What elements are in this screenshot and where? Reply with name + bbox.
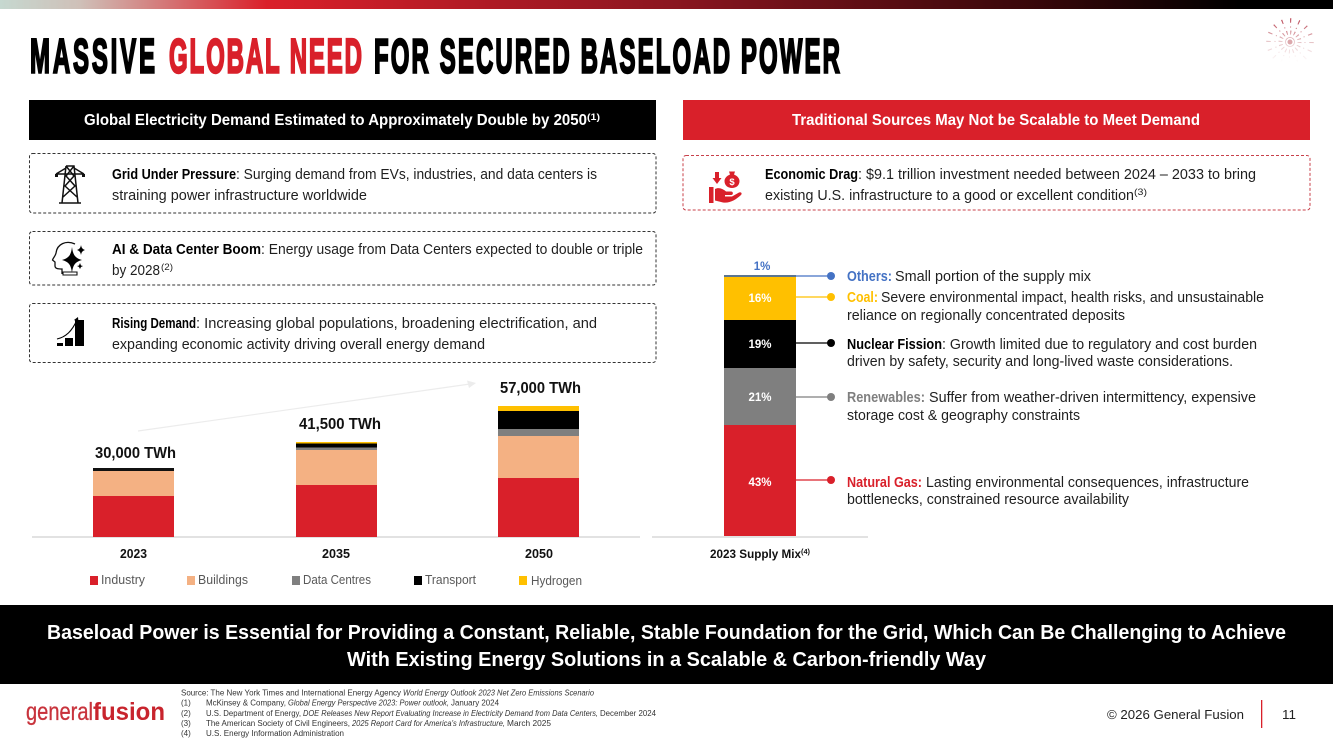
page number [1261,700,1296,728]
callout: AI and data center boom: : Energy usage from Data Centers expected to double or triple [261,242,643,258]
bar: 2050 [498,380,581,561]
text: coal [847,290,1264,324]
text: coal: reliance on regionally concentrated deposits [847,308,1125,324]
connector: nuclear fission [796,339,835,347]
source footnotes: December 2024 [600,709,657,718]
legend: Industry [101,573,146,587]
conclusion banner: Baseload Power is Essential for Providing a Constant, Reliable, Stable Foundation for the Grid, Which Can Be Challenging to Achieve [47,621,1286,644]
source footnotes: (4) [181,729,191,738]
text: natural gas: Natural Gas: [847,475,922,491]
logo: general fusion: general [26,698,93,726]
text: renewables: storage cost & geography constraints [847,408,1080,424]
legend: Transport [425,573,477,587]
legend [90,573,582,588]
source footnotes: U.S. Energy Information Administration [206,729,344,738]
icon: rising bars with arrow [57,317,84,346]
copyright: © 2026 General Fusion [1107,708,1244,722]
panel header: traditional sources: Traditional Sources May Not be Scalable to Meet Demand [792,112,1200,129]
bar: 2023 [93,445,176,561]
callout: AI and data center boom: by 2028 [112,263,160,279]
bar chart: global electricity demand [32,380,640,561]
text: renewables: Renewables: [847,390,925,406]
conclusion banner: With Existing Energy Solutions in a Scalable & Carbon-friendly Way [347,648,987,671]
stacked bar: 2023 supply mix: (4) [801,547,810,556]
stacked bar: 2023 supply mix: 2023 Supply Mix [710,547,801,561]
icon: hand with money bag: $ [729,177,735,188]
stacked bar: 2023 supply mix: 1% [754,261,770,273]
source footnotes: McKinsey & Company, [206,699,286,708]
text: natural gas: Lasting environmental consequences, infrastructure [926,475,1249,491]
text: nuclear fission: Nuclear Fission [847,337,942,353]
source footnotes: 2025 Report Card for America's Infrastructure, [351,719,505,728]
panel header: traditional sources [683,100,1310,140]
text: coal: Severe environmental impact, health risks, and unsustainable [881,290,1264,306]
bar: 2050: 2050 [525,547,553,561]
text: renewables: Suffer from weather-driven intermittency, expensive [929,390,1256,406]
bar: 2050: 57,000 TWh [500,380,581,397]
text: others: Others: [847,269,892,285]
text: natural gas: bottlenecks, constrained resource availability [847,492,1130,508]
source footnotes: (2) [181,709,191,718]
callout: grid under pressure: Grid Under Pressure [112,167,236,183]
source footnotes: DOE Releases New Report Evaluating Increase in Electricity Demand from Data Centers, [303,709,598,718]
bar: 2023: 30,000 TWh [95,445,176,462]
callout: economic drag [683,156,1310,210]
growth arrow [138,380,476,431]
stacked bar: 2023 supply mix: 19% [748,339,772,351]
icon: hand with money bag [709,172,742,203]
connector: coal [796,293,835,301]
text: others: Small portion of the supply mix [895,269,1092,285]
icon: sunburst logo mark [1268,20,1312,64]
legend: Data Centres [303,573,371,587]
source footnotes [181,689,657,738]
text: nuclear fission [847,337,1257,370]
text: natural gas [847,475,1249,508]
source footnotes: (1) [181,699,191,708]
source footnotes: U.S. Department of Energy, [206,709,301,718]
callout: AI and data center boom [30,232,656,285]
connector: others [796,272,835,280]
top gradient bar [0,0,1333,9]
text: nuclear fission: driven by safety, security and long-lived waste considerations. [847,354,1233,370]
text: nuclear fission: : Growth limited due to regulatory and cost burden [942,337,1257,353]
callout: rising demand: Rising Demand [112,316,196,332]
stacked bar: 2023 supply mix: 43% [748,477,772,489]
source footnotes: World Energy Outlook 2023 Net Zero Emissions Scenario [403,689,595,698]
callout: AI and data center boom: AI & Data Center Boom [112,242,261,258]
title: MASSIVE [30,31,155,84]
legend: Buildings [198,573,248,587]
connector: renewables [796,393,835,401]
icon: transmission tower [55,166,85,203]
callout: grid under pressure [30,154,656,213]
text: renewables [847,390,1256,424]
logo: general fusion: fusion [93,698,165,726]
bar: 2035: 2035 [322,547,350,561]
legend: Hydrogen [531,574,582,588]
title [30,31,840,84]
source footnotes: March 2025 [507,719,552,728]
panel header: demand [29,100,656,140]
bar: 2035: 41,500 TWh [299,416,381,433]
stacked bar: 2023 supply mix: 21% [748,392,772,404]
callout: economic drag: Economic Drag [765,167,858,183]
stacked bar: 2023 supply mix: 16% [748,293,772,305]
source footnotes: (3) [181,719,191,728]
logo: general fusion [26,698,165,726]
panel header: demand: (1) [587,112,600,122]
callout: grid under pressure: : Surging demand from EVs, industries, and data centers is [236,167,597,183]
callout: economic drag: (3) [1134,187,1147,197]
text: coal: Coal: [847,290,878,306]
axis [32,536,640,538]
source footnotes: Source: The New York Times and International Energy Agency [181,689,401,698]
bar: 2023: 2023 [120,547,147,561]
title: GLOBAL NEED [169,31,362,84]
page number: 11 [1282,708,1296,722]
title: FOR SECURED BASELOAD POWER [374,31,840,84]
bar: 2035 [296,416,381,561]
conclusion banner [0,605,1333,684]
connector: natural gas [796,476,835,484]
callout: grid under pressure: straining power infrastructure worldwide [112,188,367,204]
source footnotes: January 2024 [451,699,500,708]
stacked bar: 2023 supply mix [652,261,868,561]
icon: AI head with sparkles [52,242,85,275]
callout: rising demand: expanding economic activity driving overall energy demand [112,337,485,353]
callout: AI and data center boom: (2) [161,262,173,272]
callout: economic drag: existing U.S. infrastructure to a good or excellent condition [765,188,1134,204]
source footnotes: The American Society of Civil Engineers, [206,719,350,728]
source footnotes: Global Energy Perspective 2023: Power outlook, [288,699,449,708]
callout: rising demand [30,304,656,362]
callout: economic drag: : $9.1 trillion investment needed between 2024 – 2033 to bring [858,167,1256,183]
callout: rising demand: : Increasing global populations, broadening electrification, and [196,316,597,332]
panel header: demand: Global Electricity Demand Estimated to Approximately Double by 2050 [84,112,587,129]
